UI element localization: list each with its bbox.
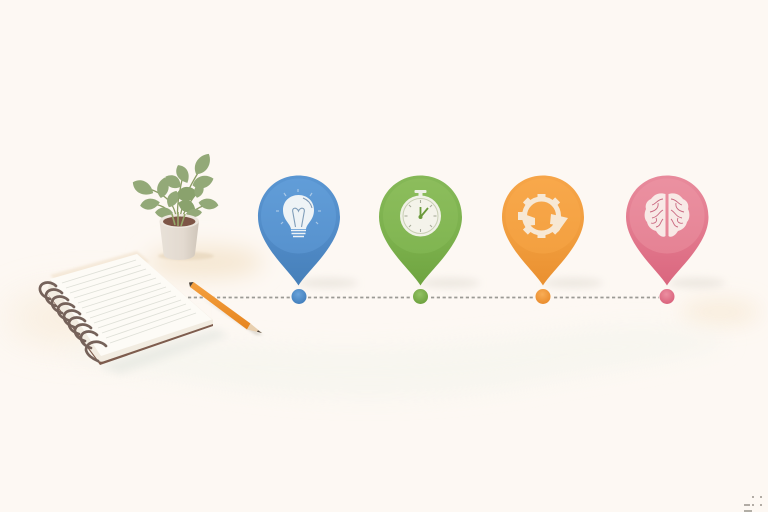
pin inner disc — [261, 178, 336, 254]
pin shadow — [669, 278, 725, 288]
plant leaves — [130, 150, 219, 218]
pin inner disc — [630, 178, 704, 254]
pin 1: blue lightbulb — [258, 176, 358, 304]
background wash — [5, 246, 760, 397]
pin body — [502, 176, 584, 286]
dotted timeline — [188, 296, 659, 298]
pin body — [379, 176, 462, 286]
icon: brain — [645, 193, 689, 237]
icon: gear with arrows — [518, 194, 568, 238]
timeline dot — [413, 289, 428, 304]
ruled lines — [62, 260, 196, 343]
pot — [160, 221, 199, 260]
timeline dot — [660, 289, 674, 304]
timeline dot — [292, 289, 306, 304]
pin 3: orange gear cycle — [502, 176, 603, 304]
spiral binding — [40, 283, 106, 361]
pin inner disc — [506, 178, 580, 254]
plant stems — [147, 165, 208, 224]
pin shadow — [543, 278, 603, 288]
notebook pages — [47, 254, 213, 362]
pin inner disc — [383, 178, 458, 254]
icon: lightbulb — [276, 189, 321, 236]
timeline dot — [536, 289, 550, 304]
notebook cover — [46, 292, 213, 365]
notebook — [40, 251, 228, 374]
pin 2: green stopwatch — [379, 176, 480, 304]
pin shadow — [420, 278, 480, 288]
pin body — [258, 176, 340, 286]
icon: stopwatch — [400, 190, 441, 236]
corner mark — [744, 496, 762, 512]
plant in pot — [130, 150, 219, 260]
pin shadow — [298, 278, 358, 288]
pencil — [189, 282, 263, 335]
pin 4: pink brain — [626, 176, 725, 304]
pin body — [626, 176, 708, 286]
